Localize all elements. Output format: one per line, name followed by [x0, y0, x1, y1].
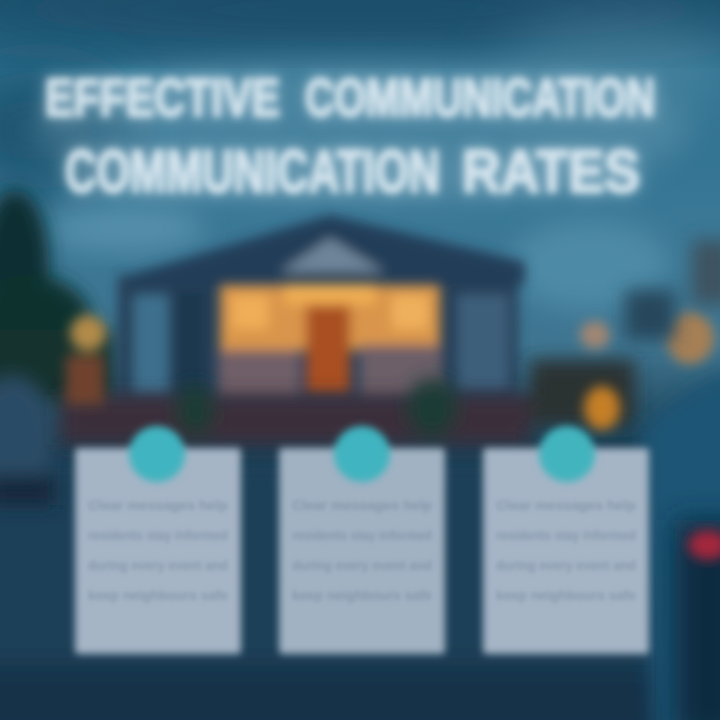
left trees — [0, 190, 115, 405]
title — [45, 68, 655, 205]
panel: right card — [483, 448, 649, 654]
panel: middle card — [279, 448, 445, 654]
title glow: RATES — [462, 138, 640, 205]
right card text: Clear messages help — [496, 497, 636, 513]
middle card text: residents stay informed — [292, 527, 432, 543]
icon: right teal circle — [539, 426, 595, 482]
title glow: EFFECTIVE — [45, 68, 280, 128]
street foreground — [0, 455, 720, 720]
left card text — [88, 497, 228, 603]
title text: COMMUNICATION — [65, 138, 440, 205]
right car — [640, 368, 720, 720]
right card text: during every event and — [496, 557, 636, 573]
left card text: residents stay informed — [88, 527, 228, 543]
middle card text: during every event and — [292, 557, 432, 573]
house body — [118, 215, 525, 410]
right card text: keep neighbours safe — [496, 587, 636, 603]
icon: middle teal circle — [334, 426, 390, 482]
title text: RATES — [462, 138, 640, 205]
title glow — [45, 68, 655, 205]
house — [118, 215, 525, 410]
panel: left card — [75, 448, 241, 654]
left card text: during every event and — [88, 557, 228, 573]
middle card text: keep neighbours safe — [292, 587, 432, 603]
middle card text: Clear messages help — [292, 497, 432, 513]
icon: left teal circle — [129, 426, 185, 482]
title text: EFFECTIVE — [45, 68, 280, 128]
left car — [0, 375, 55, 505]
title text — [45, 68, 655, 205]
left card text: keep neighbours safe — [88, 587, 228, 603]
glowing windows — [218, 284, 442, 400]
title glow: COMMUNICATION — [65, 138, 440, 205]
hedges and lamps — [60, 312, 714, 445]
right card text — [496, 497, 636, 603]
right houses — [625, 240, 720, 340]
middle card text — [292, 497, 432, 603]
left card text: Clear messages help — [88, 497, 228, 513]
right card text: residents stay informed — [496, 527, 636, 543]
